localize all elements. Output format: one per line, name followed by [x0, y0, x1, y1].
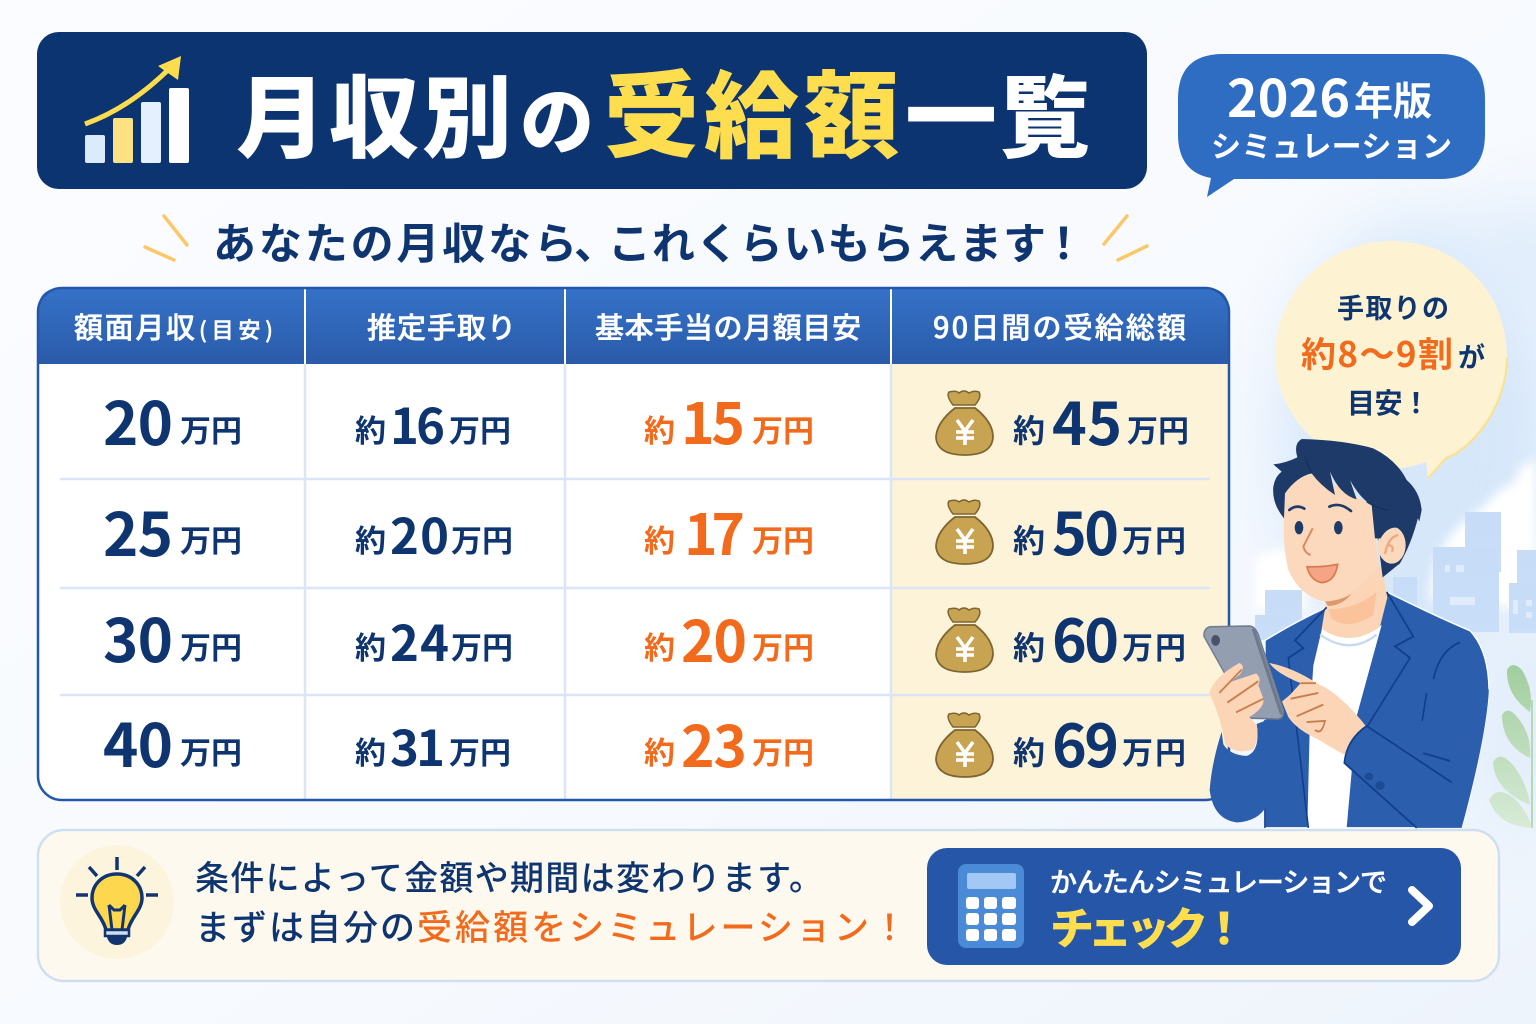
row: 40万円: 69: [1052, 699, 1119, 784]
row: 25万円: 約: [644, 516, 675, 561]
row: 20万円: 45: [1052, 377, 1122, 462]
note text: まずは自分の: [195, 900, 415, 951]
icon: light bulb: [60, 845, 174, 959]
rays left: [145, 216, 187, 260]
ear: [1378, 526, 1406, 564]
badge: 2026 edition: [1178, 54, 1485, 197]
row: 40万円: 万円: [180, 728, 242, 773]
row: 20万円: 約: [644, 406, 675, 451]
row: 40万円: 40: [103, 698, 173, 785]
row: 20万円: 万円: [449, 406, 511, 451]
row: 30万円: 約: [1013, 623, 1045, 669]
table header: 基本手当の月額目安: [595, 305, 861, 347]
row: 40万円: 約: [644, 728, 675, 773]
lapels: [1265, 592, 1460, 828]
row: 30万円: 20: [681, 597, 747, 679]
row: 20万円: [103, 376, 1189, 463]
row: 25万円: 万円: [752, 516, 814, 561]
shirt: [1307, 623, 1382, 828]
subheading: 、: [574, 210, 617, 272]
brows: [1289, 505, 1351, 511]
title text: 受給額: [604, 41, 904, 178]
row: 25万円: 約: [355, 516, 386, 561]
title text: 覧: [1000, 46, 1090, 176]
row: 30万円: 30: [103, 593, 173, 680]
icon: money bag: [936, 608, 993, 672]
row: 25万円: [103, 487, 1186, 574]
row: 30万円: 約: [644, 623, 675, 668]
row: 20万円: 約: [1013, 406, 1045, 452]
subheading: [145, 210, 1147, 272]
simulation button: かんたんシミュレーションで: [1050, 861, 1387, 900]
plant: [1489, 665, 1532, 828]
salary table: [38, 288, 1229, 800]
highlighted total column: [892, 364, 1228, 799]
jacket: [1265, 592, 1489, 828]
row: 25万円: 25: [103, 487, 173, 574]
icon: money bag: [936, 713, 993, 777]
eyes: [1295, 521, 1303, 534]
speech bubble: 手取りの: [1337, 287, 1449, 326]
row: 30万円: 万円: [752, 623, 814, 668]
icon: rising bar chart: [85, 56, 189, 163]
subheading: ！: [1042, 210, 1085, 272]
arrow chevron: [1412, 890, 1429, 922]
table header: [38, 288, 1229, 364]
table header: (目安): [199, 313, 273, 345]
speech bubble: 約8～9割: [1301, 327, 1453, 378]
row: 40万円: 万円: [752, 728, 814, 773]
sleeve left: [1210, 720, 1267, 822]
row: 40万円: [103, 698, 1186, 785]
bottom note panel: [38, 830, 1499, 981]
nose: [1303, 528, 1313, 555]
row: 30万円: 万円: [1122, 623, 1186, 668]
row: 25万円: 20: [390, 498, 449, 569]
right hand: [1269, 663, 1367, 761]
row: 25万円: 万円: [1122, 516, 1186, 561]
row: 20万円: 16: [390, 388, 445, 459]
person with smartphone: [1204, 439, 1489, 828]
row: 20万円: 万円: [752, 406, 814, 451]
row: 20万円: 万円: [1127, 406, 1189, 451]
row: 40万円: 万円: [449, 728, 511, 773]
rays right: [1104, 216, 1147, 260]
speech bubble: が: [1458, 336, 1485, 375]
left hand: [1209, 663, 1263, 751]
face: [1284, 472, 1379, 602]
row: 25万円: 50: [1052, 487, 1119, 572]
title text: の: [520, 63, 594, 170]
row: 20万円: 20: [103, 376, 173, 463]
row: 25万円: 約: [1013, 516, 1045, 562]
badge: 2026 edition: 年版: [1354, 71, 1432, 127]
simulation button: [927, 848, 1461, 965]
row: 20万円: 15: [681, 379, 745, 461]
speech bubble: [1275, 241, 1507, 478]
row: 40万円: 万円: [1122, 728, 1186, 773]
table header: 額面月収: [74, 305, 195, 347]
row: 30万円: [103, 593, 1186, 680]
table header: 推定手取り: [367, 305, 516, 347]
icon: money bag: [936, 500, 993, 564]
row: 40万円: 約: [1013, 728, 1045, 774]
row: 30万円: 60: [1052, 594, 1119, 679]
neck: [1322, 565, 1387, 638]
hair: [1273, 439, 1422, 538]
icon: calculator: [958, 864, 1024, 948]
row: 20万円: 約: [355, 406, 386, 451]
table header: 90日間の受給総額: [933, 305, 1186, 347]
icon: money bag: [936, 391, 993, 455]
badge: 2026 edition: シミュレーション: [1211, 122, 1452, 166]
note text: 条件によって金額や期間は変わります。: [195, 851, 823, 900]
sleeve right: [1344, 689, 1489, 828]
row: 30万円: 約: [355, 623, 386, 668]
row: 30万円: 24: [390, 605, 449, 676]
note text: [195, 851, 907, 951]
row: 40万円: 31: [390, 710, 445, 781]
mouth: [1307, 564, 1338, 583]
subheading: あなたの月収なら: [213, 210, 577, 272]
row: 40万円: 約: [355, 728, 386, 773]
row: 25万円: 万円: [180, 516, 242, 561]
head: [1273, 439, 1422, 606]
neck shadow: [1325, 593, 1352, 606]
row: 30万円: 万円: [451, 623, 513, 668]
row: 25万円: 17: [684, 490, 745, 572]
row: 20万円: 万円: [180, 406, 242, 451]
title text: 一: [905, 44, 997, 177]
city skyline background: [1255, 512, 1536, 640]
title banner: [37, 32, 1147, 189]
title text: [236, 41, 1090, 178]
row: 25万円: 万円: [451, 516, 513, 561]
row: 30万円: 万円: [180, 623, 242, 668]
note text: 受給額をシミュレーション！: [417, 900, 907, 951]
speech bubble: 目安！: [1347, 382, 1430, 422]
phone: [1204, 626, 1283, 719]
simulation button: チェック！: [1050, 893, 1246, 957]
subheading: これくらいもらえます: [608, 210, 1046, 272]
row: 40万円: 23: [681, 702, 747, 784]
back hair: [1377, 497, 1418, 577]
title text: 月収別: [236, 46, 515, 176]
badge: 2026 edition: 2026: [1227, 57, 1350, 132]
